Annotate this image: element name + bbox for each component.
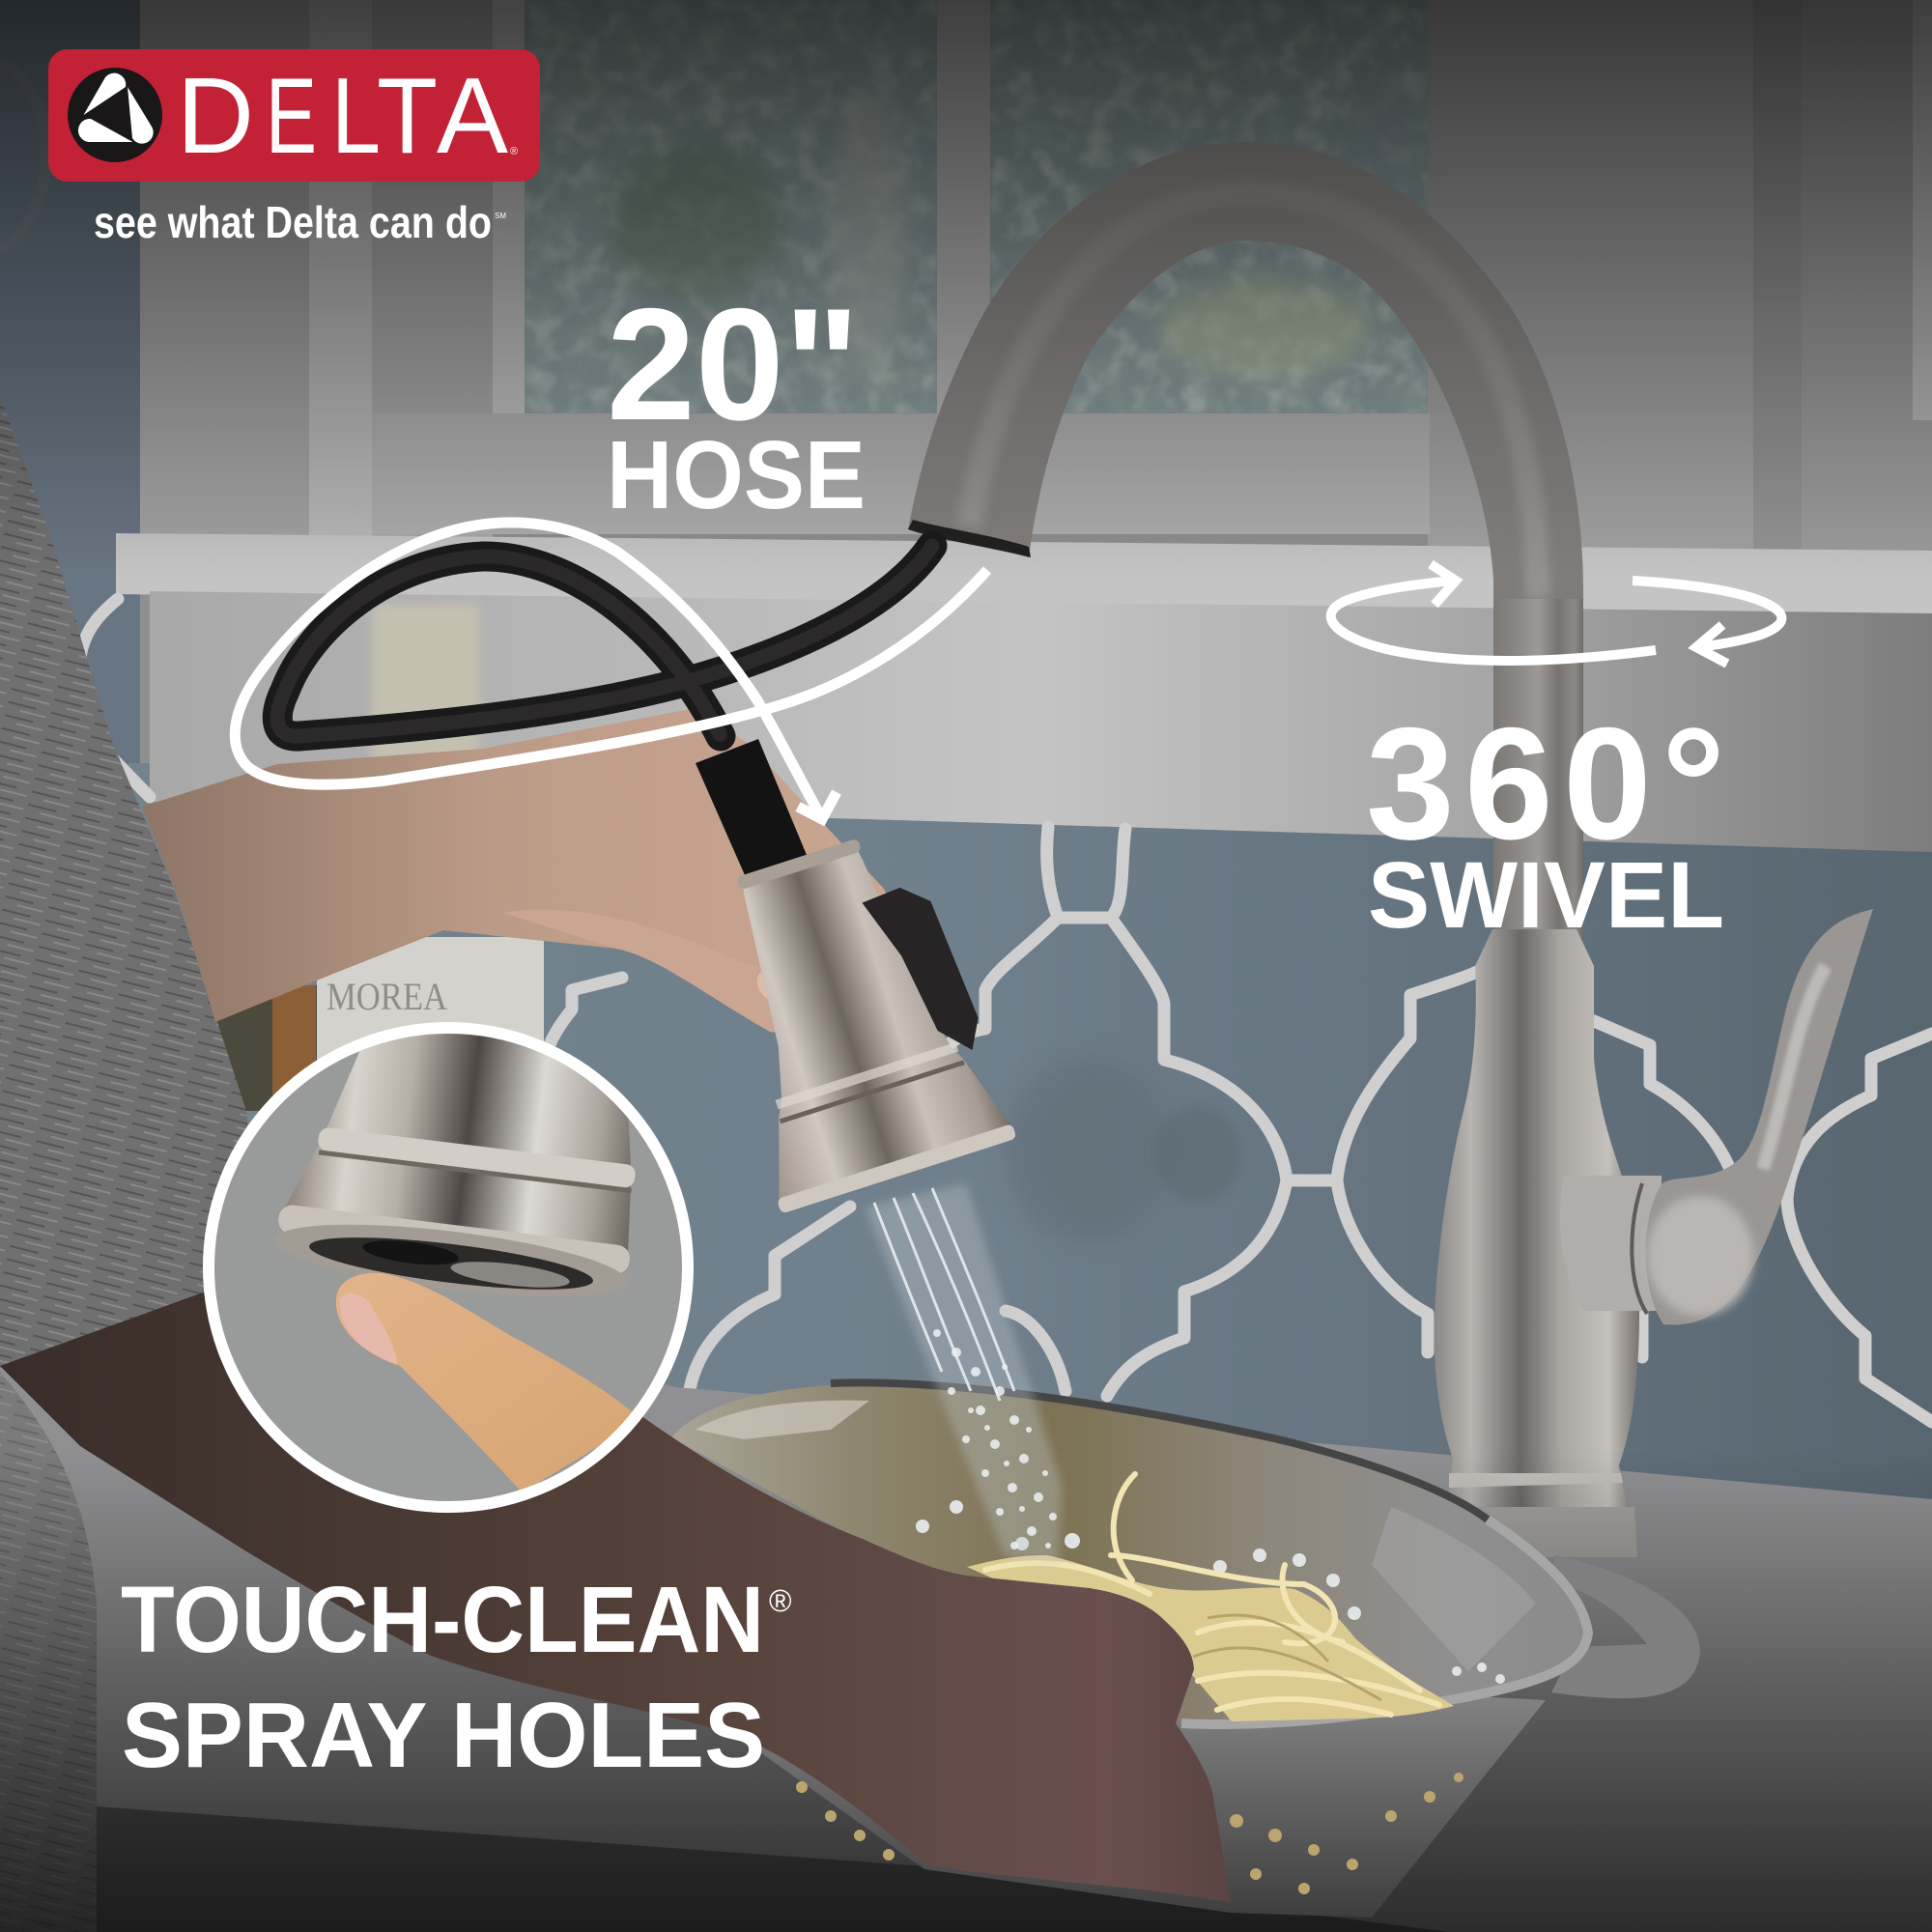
bottle and box behind hand: [217, 604, 544, 1121]
bottle and box behind hand: MOREA: [327, 975, 447, 1018]
hose: [277, 546, 932, 736]
tagline: see what Delta can do: [94, 197, 492, 247]
lower finger: [502, 909, 813, 1033]
hose label: HOSE: [607, 421, 866, 529]
arrow: hose path around loop: [235, 523, 987, 819]
touch-clean line: TOUCH-CLEAN: [121, 1567, 764, 1672]
registered mark: ®: [769, 1583, 792, 1618]
left swivel arrow: [1331, 564, 1656, 661]
service mark: SM: [495, 212, 506, 220]
thumbnail: [750, 959, 811, 1015]
wordmark: D: [177, 56, 254, 176]
faucet: handle lever: [1560, 909, 1873, 1324]
raised arm and hand holding sprayer: [142, 708, 916, 1033]
wordmark: A: [437, 56, 508, 176]
bowl interior: [671, 1384, 1588, 1724]
callout: 20 inch hose: [607, 275, 866, 529]
callout: 360 degree swivel: [1366, 695, 1725, 948]
faucet: body and base: [1435, 929, 1639, 1557]
wordmark: T: [377, 56, 438, 176]
spaghetti: [967, 1474, 1454, 1721]
sprayer connector: [696, 739, 807, 884]
wordmark: E: [266, 56, 317, 176]
lower arm and hand holding bowl: [0, 1293, 1231, 1902]
swivel value: 360°: [1366, 695, 1725, 872]
countertop: [0, 1246, 1932, 1932]
sill below window: [372, 413, 1430, 534]
decorative arc on left wall: [0, 58, 46, 251]
sweater sleeves: [0, 396, 248, 1932]
window panes with tree foliage: [525, 0, 1428, 413]
colander holes: [916, 1500, 1505, 1684]
counter front edge: [97, 1806, 1449, 1932]
arrows: 360 degree swivel: [1331, 564, 1781, 664]
tile backsplash with arabesque grout: [0, 599, 1932, 1507]
window ledge: [116, 533, 1932, 618]
right swivel arrow: [1633, 581, 1781, 664]
sprayer buttons: [862, 877, 987, 1068]
bowl handle: [1550, 1555, 1700, 1698]
water spray: [865, 1183, 1063, 1565]
swivel label: SWIVEL: [1368, 842, 1724, 948]
colander bowl: [671, 1382, 1700, 1918]
bowl exterior: [734, 1681, 1546, 1918]
spray holes line: SPRAY HOLES: [122, 1684, 765, 1787]
apron under ledge: [150, 591, 1932, 852]
red badge: [48, 49, 540, 182]
wordmark: L: [331, 56, 381, 176]
delta symbol: [68, 68, 162, 162]
finger pressing spray holes: [336, 1273, 642, 1492]
logo: [48, 49, 540, 247]
callout: touch-clean spray holes: [121, 1567, 792, 1787]
inset circle: touch-clean spray holes close-up: [207, 985, 690, 1509]
faucet: gooseneck spout: [908, 142, 1583, 937]
wordmark: [177, 56, 508, 176]
registered mark: ®: [510, 146, 518, 157]
close-up sprayer head: [276, 1034, 636, 1296]
pull-down sprayer head: [679, 820, 1017, 1214]
hose length value: 20": [607, 275, 860, 453]
